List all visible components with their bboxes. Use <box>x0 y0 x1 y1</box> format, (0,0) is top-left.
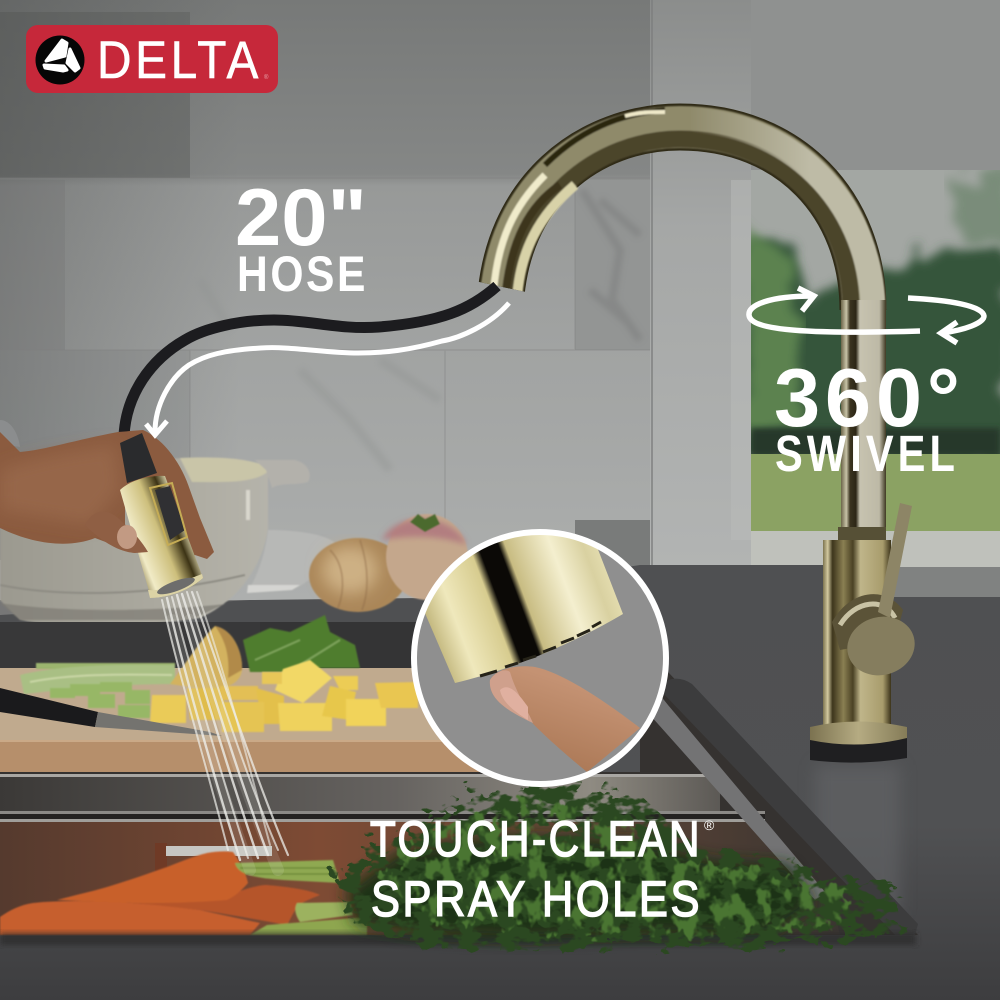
pot <box>0 457 310 626</box>
spray holes text: SPRAY HOLES <box>371 871 702 927</box>
thumb <box>85 511 148 553</box>
spray holes <box>480 622 601 676</box>
hand sprayer <box>120 433 203 598</box>
sink interior <box>0 672 918 935</box>
lettuce leaves <box>243 615 360 672</box>
front counter shadow <box>0 933 916 945</box>
faucet base <box>810 722 907 763</box>
callout: 360 degree swivel <box>774 351 960 482</box>
brass nozzle <box>425 535 623 683</box>
number 360: 360° <box>774 351 960 444</box>
knife <box>0 688 222 736</box>
word hose: HOSE <box>237 246 368 302</box>
number 20: 20" <box>235 173 367 263</box>
celery <box>20 663 175 718</box>
cutting board <box>0 668 480 772</box>
registered mark: ® <box>264 74 269 81</box>
logo emblem <box>36 36 84 84</box>
fingernail <box>500 687 528 720</box>
callout: touch-clean spray holes <box>370 811 715 927</box>
faucet spout and neck <box>493 110 886 535</box>
faucet body <box>823 527 903 730</box>
countertop <box>0 565 1000 1000</box>
word swivel: SWIVEL <box>775 425 959 482</box>
callout: 20 inch hose <box>235 173 368 302</box>
turnip <box>382 514 468 600</box>
faucet reflection on counter <box>815 765 900 915</box>
logo wordmark: DELTA <box>97 31 262 90</box>
plate <box>247 530 337 593</box>
water spray <box>162 592 288 870</box>
window sill and frame <box>751 531 1000 597</box>
onion <box>309 538 407 612</box>
touch-clean text: TOUCH-CLEAN <box>370 811 702 867</box>
fingertip pad <box>490 670 533 723</box>
carrot greens <box>335 785 900 950</box>
Delta logo <box>26 25 278 93</box>
registered mark: ® <box>704 817 715 833</box>
kitchen wall background <box>0 0 1000 600</box>
carrots <box>0 851 367 935</box>
faucet lever handle <box>841 503 921 683</box>
hose length arrow <box>146 303 509 435</box>
potato cubes <box>150 660 418 732</box>
fingertip <box>490 666 640 772</box>
swivel arrows <box>749 288 984 343</box>
back counter shadow <box>0 622 260 670</box>
window with trees and lawn <box>740 165 1000 534</box>
sink steel lip <box>650 695 826 900</box>
hose <box>124 286 497 436</box>
big potato <box>170 626 242 690</box>
inset circle: spray holes detail <box>411 529 669 787</box>
sink dark rim <box>660 679 918 935</box>
hand <box>0 420 214 560</box>
